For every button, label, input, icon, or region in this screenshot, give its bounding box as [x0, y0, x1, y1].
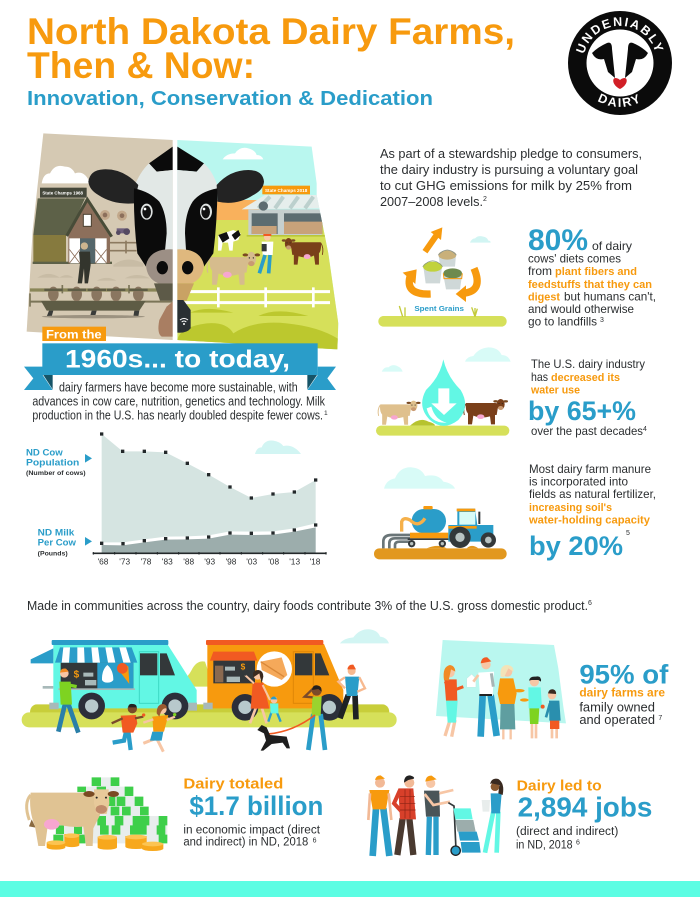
worker in orange shirt: [368, 775, 391, 856]
area chart: ND cow population and milk per cow: [26, 432, 327, 567]
icon: coins: [47, 833, 163, 851]
x axis: '03: [246, 557, 257, 567]
stat: 95 percent family owned: 7: [658, 715, 662, 722]
stat: water use by 65 percent: [528, 357, 647, 438]
label: ND cow population: ND Cow: [26, 448, 63, 458]
stat: 80 percent of diets: go to landfills: [528, 314, 597, 328]
from the label: From the: [46, 327, 102, 341]
person: woman with pitcher: [444, 665, 463, 737]
x axis: [93, 552, 327, 567]
stat: water use by 65 percent: 4: [643, 426, 647, 433]
stat: manure by 20 percent: [528, 462, 656, 561]
stat: 2,894 jobs: (direct and indirect): [516, 824, 618, 838]
worker in plaid shirt: [394, 775, 416, 855]
logo: Undeniably Dairy: [568, 11, 672, 115]
x axis: '83: [162, 557, 173, 567]
family group on North Dakota map: [368, 640, 668, 856]
label: ND milk per cow: [38, 527, 92, 558]
sign: State Champs 2018: State Champs 2018: [265, 188, 308, 193]
stat: 95 percent family owned: dairy farms are: [579, 686, 665, 700]
stat: 1.7 billion: [183, 776, 323, 849]
stat: water use by 65 percent: The U.S. dairy industry: [531, 357, 645, 371]
milk per cow area: [102, 523, 316, 553]
grilled cheese truck: $: [241, 661, 246, 671]
ribbon banner: 1960s to today: [24, 343, 336, 390]
stewardship paragraph: As part of a stewardship pledge to consumers,: [380, 146, 642, 161]
person: boy with ice cream: [541, 689, 561, 738]
black and white cow: [218, 230, 241, 251]
ice cream truck: [31, 640, 197, 719]
ribbon banner: 1960s to today: 1960s... to today,: [65, 346, 290, 374]
label: ND cow population: (Number of cows): [26, 470, 86, 477]
stat: manure by 20 percent: fields as natural fertilizer,: [529, 487, 656, 501]
icon: tractor with manure tank: [374, 467, 507, 559]
stat: 1.7 billion: Dairy totaled: [183, 776, 283, 792]
pitcher: [467, 674, 476, 687]
communities statement: Made in communities across the country, dairy foods contribute 3% of the U.S. gross domestic product.: [27, 599, 588, 613]
stat: 80 percent of diets: 80%: [528, 224, 588, 257]
x axis: '08: [268, 557, 279, 567]
sign: State Champs 2018: [262, 186, 310, 194]
stat: 2,894 jobs: [516, 779, 652, 851]
stat: 95 percent family owned: family owned: [579, 701, 655, 715]
data points: [100, 432, 317, 545]
label: ND cow population: [26, 448, 92, 477]
stewardship paragraph: to cut GHG emissions for milk by 25% from: [380, 178, 632, 193]
x axis: '18: [310, 557, 321, 567]
stat: manure by 20 percent: by 20%: [529, 531, 623, 561]
economic impact section: [27, 776, 323, 851]
x axis: '13: [289, 557, 300, 567]
stat: water use by 65 percent: over the past decades: [531, 424, 643, 438]
communities statement: 6: [588, 600, 592, 607]
worker with hand truck: [424, 776, 481, 855]
stat: 1.7 billion: in economic impact (direct: [183, 822, 321, 836]
stat: 2,894 jobs: Dairy led to: [517, 779, 602, 795]
ground: [22, 704, 397, 727]
stat: water use by 65 percent: water use: [530, 384, 580, 396]
icon: water drop and cows: [376, 347, 511, 436]
stewardship paragraph: 2007–2008 levels.: [380, 194, 483, 209]
sign: State Champs 1968: [40, 188, 87, 198]
then and now illustration: North Dakota map: [24, 133, 340, 422]
stat: manure by 20 percent: Most dairy farm manure: [529, 462, 651, 476]
cow face centre: [88, 147, 264, 337]
stat: manure by 20 percent: is incorporated into: [529, 474, 628, 488]
stat: 2,894 jobs: in ND, 2018: [516, 837, 573, 851]
icon: money pile: [53, 777, 167, 843]
title: [27, 11, 515, 86]
food truck scene: [22, 629, 397, 752]
icon: spent grains recycling: [378, 227, 507, 327]
stat: 80 percent of diets: [528, 224, 656, 328]
label: ND milk per cow: ND Milk: [38, 527, 75, 537]
stat: 1.7 billion: $1.7 billion: [189, 791, 323, 821]
ice cream truck: $: [74, 669, 80, 680]
label: ND milk per cow: (Pounds): [38, 551, 68, 558]
intro paragraph: production in the U.S. has nearly doubled despite fewer cows.: [32, 408, 323, 422]
stat: 80 percent of diets: of dairy: [592, 239, 632, 253]
sign: State Champs 1968: State Champs 1968: [42, 190, 84, 195]
title: North Dakota Dairy Farms,: [27, 11, 515, 52]
stat: 80 percent of diets: 3: [600, 317, 604, 324]
footer band: [0, 881, 700, 897]
person: girl with plate: [520, 676, 542, 738]
stewardship paragraph: the dairy industry is pursuing a voluntary goal: [380, 162, 638, 177]
row of cows at trough: [44, 287, 148, 301]
x axis: '68: [98, 557, 109, 567]
person: grandmother: [498, 665, 525, 739]
stat: 80 percent of diets: digest: [528, 292, 560, 304]
worker with clipboard: [482, 779, 503, 853]
intro paragraph: 1: [324, 410, 328, 417]
subtitle: Innovation, Conservation & Dedication: [27, 88, 433, 110]
person: woman walking dog: [268, 685, 325, 750]
farmer 1968: [78, 242, 91, 283]
stat: 1.7 billion: 6: [313, 837, 317, 844]
stat: 80 percent of diets: feedstuffs that they can: [528, 279, 652, 291]
workers group: [368, 775, 503, 856]
logo: Undeniably Dairy: UNDENIABLY: [576, 17, 664, 53]
stewardship paragraph: 2: [483, 196, 487, 203]
brown cow: [282, 238, 323, 265]
x axis: '98: [226, 557, 237, 567]
stat: manure by 20 percent: 5: [626, 530, 630, 537]
x axis: '78: [141, 557, 152, 567]
dog: [257, 725, 290, 751]
x axis: '93: [204, 557, 215, 567]
stat: water use by 65 percent: has: [531, 370, 548, 384]
label: ND milk per cow: Per Cow: [38, 537, 77, 547]
stat: 2,894 jobs: 2,894 jobs: [518, 792, 652, 823]
stat: manure by 20 percent: increasing soil's: [529, 502, 612, 514]
stat: 80 percent of diets: and would otherwise: [528, 302, 634, 316]
left panel: farm in 1968: [27, 133, 173, 340]
intro paragraph: [32, 381, 328, 422]
trough: [41, 301, 146, 318]
icon: spent grains recycling: Spent Grains: [414, 306, 464, 313]
tan cow: [207, 252, 260, 285]
person: man in blue shirt with cap: [338, 665, 365, 719]
stat: 80 percent of diets: from: [528, 264, 552, 278]
logo: Undeniably Dairy: DAIRY: [598, 94, 638, 107]
stat: 95 percent family owned: [579, 659, 668, 727]
stat: 80 percent of diets: plant fibers and: [555, 266, 637, 278]
grilled cheese truck: [203, 640, 343, 721]
stat: water use by 65 percent: by 65+%: [528, 396, 636, 426]
icon: tan cow: [27, 789, 119, 846]
title: Then & Now:: [27, 45, 255, 86]
person: running boy: [112, 704, 145, 750]
person: woman in red dress with child: [242, 670, 281, 723]
person: running girl: [143, 704, 176, 752]
label: ND cow population: Population: [26, 458, 80, 468]
x axis: '88: [183, 557, 194, 567]
stewardship paragraph: [380, 146, 642, 209]
right panel: farm in 2018: [177, 140, 340, 353]
cow population area: [102, 434, 316, 553]
farmer 2018: [259, 234, 273, 273]
x axis: '73: [119, 557, 130, 567]
stat: water use by 65 percent: decreased its: [551, 372, 620, 384]
stat: 95 percent family owned: and operated: [579, 713, 655, 727]
person: man with cap: [473, 657, 497, 737]
stat: 80 percent of diets: but humans can't,: [564, 290, 656, 304]
stat: manure by 20 percent: water-holding capacity: [528, 514, 651, 526]
stat: 80 percent of diets: cows' diets comes: [528, 252, 621, 266]
person: man in green shirt: [58, 668, 78, 733]
intro paragraph: advances in cow care, nutrition, genetics and technology. Milk: [32, 395, 326, 409]
intro paragraph: dairy farmers have become more sustainable, with: [59, 381, 298, 395]
stat: 2,894 jobs: 6: [576, 840, 580, 847]
stat: 1.7 billion: and indirect) in ND, 2018: [183, 835, 309, 849]
stat: 95 percent family owned: 95% of: [579, 659, 668, 689]
right column illustrations: [374, 227, 511, 559]
